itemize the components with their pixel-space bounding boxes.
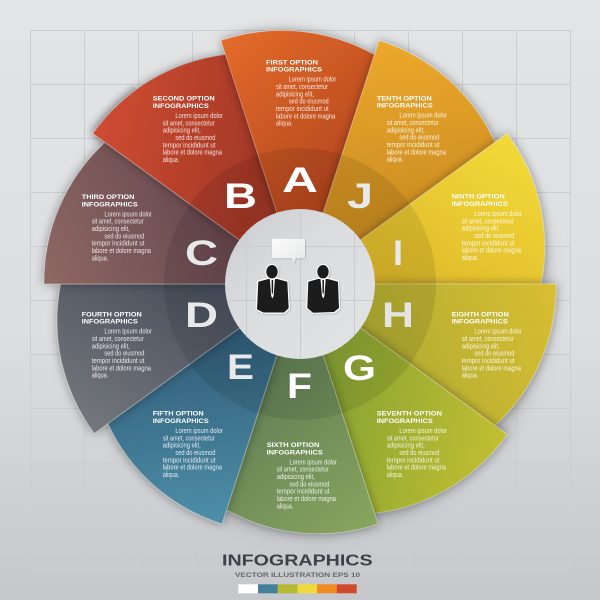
text block: fourth option: sit amet, consectetur <box>92 336 144 343</box>
text block: eighth option: aliqua. <box>462 373 478 380</box>
text block: fourth option: tempor incididunt ut <box>92 358 144 365</box>
title: INFOGRAPHICS <box>222 553 373 570</box>
text block: ninth option: tempor incididunt ut <box>462 240 514 247</box>
text block: ninth option: INFOGRAPHICS <box>452 202 508 208</box>
text block: tenth option: tempor incididunt ut <box>387 142 439 149</box>
text block: sixth option <box>267 443 337 510</box>
text block: second option <box>153 97 223 164</box>
text block: third option: adipisicing elit, <box>92 226 130 233</box>
text block: second option: sed do eiusmod <box>175 135 216 142</box>
text block: first option: tempor incididunt ut <box>276 106 329 113</box>
text block: eighth option: labore et dolore magna <box>462 365 521 372</box>
text block: sixth option: adipisicing elit, <box>277 474 315 481</box>
text block: eighth option: sed do eiusmod <box>474 351 515 358</box>
text block: tenth option <box>377 96 447 164</box>
text block: third option: labore et dolore magna <box>92 248 151 255</box>
text block: fifth option: sit amet, consectetur <box>163 435 215 442</box>
text block: sixth option: SIXTH OPTION <box>267 443 319 449</box>
sector E <box>94 241 363 532</box>
text block: fourth option: aliqua. <box>92 373 108 380</box>
text block: second option: tempor incididunt ut <box>163 142 215 149</box>
center hub <box>220 205 380 360</box>
letter H: H <box>382 296 414 335</box>
text block: first option <box>266 60 337 128</box>
text block: tenth option: adipisicing elit, <box>387 127 425 134</box>
text block: ninth option: Lorem ipsum dolor <box>474 211 522 218</box>
text block: third option: Lorem ipsum dolor <box>104 211 152 218</box>
text block: eighth option: tempor incididunt ut <box>462 358 514 365</box>
sector I <box>276 130 564 355</box>
colour legend bar <box>238 584 357 593</box>
text block: sixth option: labore et dolore magna <box>277 496 336 503</box>
text block: tenth option: labore et dolore magna <box>387 149 446 156</box>
text block: fifth option: tempor incididunt ut <box>163 457 215 464</box>
sector F <box>227 284 378 534</box>
letter I: I <box>393 234 403 273</box>
text block: tenth option: sit amet, consectetur <box>387 120 439 127</box>
text block: fourth option: adipisicing elit, <box>92 343 130 350</box>
text block: eighth option <box>452 312 522 380</box>
text block: fourth option: FOURTH OPTION <box>82 312 142 318</box>
text block: seventh option: sed do eiusmod <box>399 450 440 457</box>
text block: first option: adipisicing elit, <box>276 91 314 98</box>
text block: seventh option: adipisicing elit, <box>387 443 425 450</box>
text block: ninth option: sed do eiusmod <box>474 233 515 240</box>
letter D: D <box>185 296 218 335</box>
text block: tenth option: INFOGRAPHICS <box>377 104 433 110</box>
text block: second option: SECOND OPTION <box>153 97 215 103</box>
text block: third option: INFOGRAPHICS <box>82 202 138 208</box>
text block: seventh option: SEVENTH OPTION <box>377 412 442 418</box>
letter C: C <box>185 234 218 273</box>
text block: eighth option: adipisicing elit, <box>462 343 500 350</box>
text block: sixth option: sed do eiusmod <box>289 481 330 488</box>
text block: ninth option: sit amet, consectetur <box>462 218 514 225</box>
text block: sixth option: sit amet, consectetur <box>277 467 329 474</box>
text block: fourth option: sed do eiusmod <box>104 351 145 358</box>
inner dark ring <box>164 148 436 420</box>
wheel shadow <box>72 56 548 532</box>
text block: ninth option: labore et dolore magna <box>462 248 521 255</box>
text block: seventh option: labore et dolore magna <box>387 465 446 472</box>
text block: second option: sit amet, consectetur <box>163 120 215 127</box>
sector D <box>38 214 324 436</box>
sector C <box>35 135 323 359</box>
text block: fifth option: aliqua. <box>163 472 179 479</box>
text block: seventh option: Lorem ipsum dolor <box>399 428 447 435</box>
letter E: E <box>227 348 254 387</box>
text block: third option: sit amet, consectetur <box>92 219 144 226</box>
text block: first option: aliqua. <box>276 121 293 128</box>
text block: fourth option: INFOGRAPHICS <box>82 320 138 326</box>
sector A <box>221 31 375 284</box>
text block: eighth option: EIGHTH OPTION <box>452 312 509 318</box>
text block: tenth option: Lorem ipsum dolor <box>399 113 447 120</box>
text block: fifth option: FIFTH OPTION <box>153 412 204 418</box>
letter F: F <box>287 367 312 406</box>
text block: tenth option: sed do eiusmod <box>399 135 440 142</box>
text block: tenth option: TENTH OPTION <box>377 96 432 102</box>
text block: third option <box>82 195 152 262</box>
text block: first option: FIRST OPTION <box>266 60 318 66</box>
text block: seventh option <box>377 412 447 479</box>
text block: fifth option: sed do eiusmod <box>175 450 216 457</box>
text block: tenth option: aliqua. <box>387 157 403 164</box>
text block: seventh option: tempor incididunt ut <box>387 457 439 464</box>
text block: fourth option: labore et dolore magna <box>92 365 151 372</box>
text block: eighth option: INFOGRAPHICS <box>452 320 508 326</box>
text block: second option: adipisicing elit, <box>163 128 201 135</box>
text block: first option: sed do eiusmod <box>289 99 329 106</box>
text block: first option: INFOGRAPHICS <box>266 68 322 74</box>
letter B: B <box>224 177 257 216</box>
sector H <box>277 209 565 433</box>
text block: second option: aliqua. <box>163 157 179 164</box>
text block: third option: sed do eiusmod <box>104 233 145 240</box>
text block: eighth option: sit amet, consectetur <box>462 336 514 343</box>
text block: ninth option: adipisicing elit, <box>462 226 500 233</box>
letter G: G <box>343 349 376 388</box>
text block: third option: aliqua. <box>92 255 108 262</box>
text block: first option: sit amet, consectetur <box>276 84 329 91</box>
text block: seventh option: aliqua. <box>387 472 403 479</box>
sector J <box>236 32 509 328</box>
text block: sixth option: tempor incididunt ut <box>277 489 329 496</box>
text block: fourth option: Lorem ipsum dolor <box>104 329 152 336</box>
text block: fifth option: INFOGRAPHICS <box>153 419 209 425</box>
text block: second option: labore et dolore magna <box>163 150 222 157</box>
icon: right businessman <box>306 264 340 314</box>
text block: fifth option: labore et dolore magna <box>163 465 222 472</box>
text block: seventh option: sit amet, consectetur <box>387 435 439 442</box>
letter A: A <box>282 161 318 200</box>
sector B overlap tip <box>90 85 242 242</box>
text block: first option: labore et dolore magna <box>276 113 335 120</box>
text block: ninth option: aliqua. <box>462 255 478 262</box>
text block: sixth option: INFOGRAPHICS <box>267 450 323 456</box>
letter J: J <box>347 177 373 216</box>
text block: sixth option: aliqua. <box>277 503 293 510</box>
text block: first option: Lorem ipsum dolor <box>289 77 337 84</box>
text block: second option: Lorem ipsum dolor <box>175 113 223 120</box>
text block: fifth option: Lorem ipsum dolor <box>175 428 223 435</box>
text block: fourth option <box>82 312 152 380</box>
sector G <box>240 238 513 533</box>
text block: seventh option: INFOGRAPHICS <box>377 419 433 425</box>
text block: eighth option: Lorem ipsum dolor <box>474 329 522 336</box>
text block: second option: INFOGRAPHICS <box>153 104 209 110</box>
text block: ninth option: NINTH OPTION <box>452 195 505 201</box>
icon: speech bubble <box>272 239 305 265</box>
wheel of ten sectors <box>35 31 565 534</box>
sector B base <box>87 35 360 330</box>
text block: third option: tempor incididunt ut <box>92 241 144 248</box>
text block: fifth option: adipisicing elit, <box>163 443 201 450</box>
subtitle: VECTOR ILLUSTRATION EPS 10 <box>235 573 361 579</box>
icon: left businessman <box>256 264 290 314</box>
text block: ninth option <box>452 195 522 262</box>
text block: third option: THIRD OPTION <box>82 195 134 201</box>
text block: sixth option: Lorem ipsum dolor <box>289 459 337 466</box>
text block: fifth option <box>153 412 223 479</box>
